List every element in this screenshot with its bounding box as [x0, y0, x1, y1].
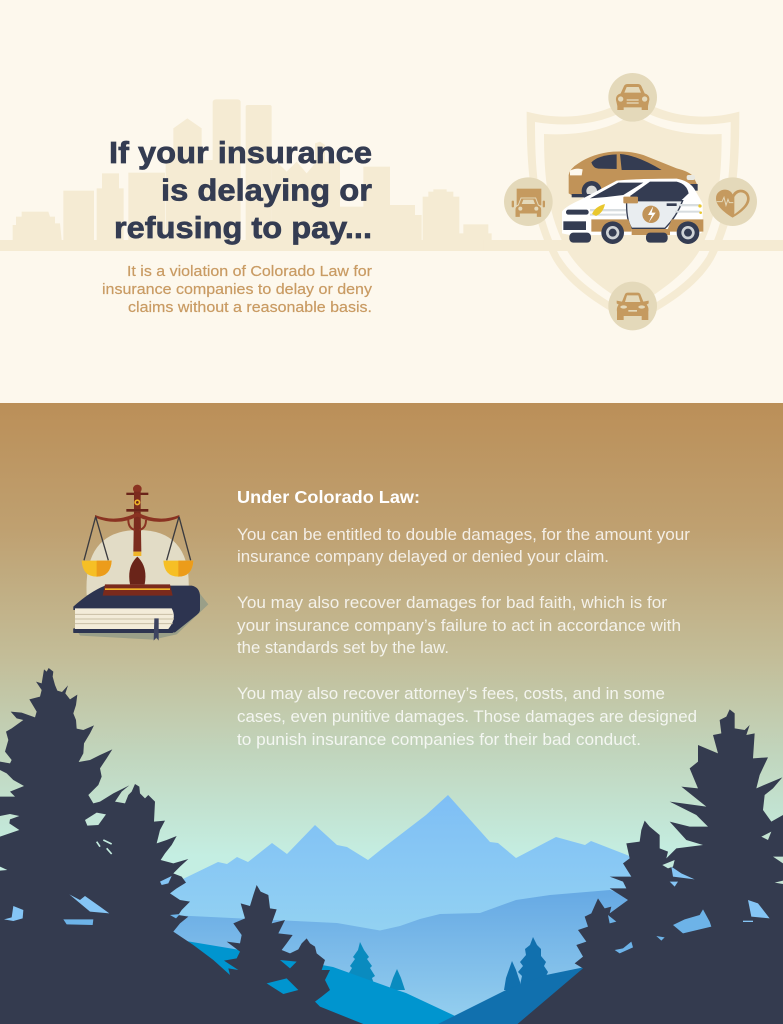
paragraph 3: You may also recover attorney’s fees, costs, and in some — [237, 685, 665, 703]
book cover — [73, 586, 200, 632]
sky holes — [85, 813, 106, 826]
lower section sky gradient — [0, 403, 783, 1024]
icon: car circle top — [608, 73, 657, 122]
paragraph 3: cases, even punitive damages. Those damages are designed — [237, 708, 697, 726]
top section background — [0, 0, 783, 403]
shield and cars illustration — [483, 73, 783, 330]
paragraph 2: your insurance company’s failure to act in accordance with — [237, 617, 681, 635]
heading: Under Colorado Law: Under Colorado Law: — [237, 487, 420, 507]
landscape — [0, 668, 783, 1024]
paragraph 2 — [237, 594, 681, 657]
small blue trees — [346, 942, 405, 990]
left pan — [82, 561, 112, 577]
paragraph 1 — [237, 526, 691, 566]
paragraph 2: the standards set by the law. — [237, 639, 449, 657]
icon: heart circle right — [708, 177, 757, 226]
shield outline — [527, 95, 739, 323]
city skyline — [13, 99, 492, 244]
halo — [86, 530, 189, 595]
title: refusing to pay... — [114, 210, 372, 245]
icon: car circle bottom — [608, 282, 657, 330]
paragraph 1: insurance company delayed or denied your claim. — [237, 548, 609, 566]
base — [103, 584, 173, 596]
paragraph 3 — [237, 685, 697, 749]
ground line — [0, 240, 783, 251]
subtitle — [102, 264, 373, 316]
shield gap — [535, 105, 731, 316]
brown car — [569, 151, 698, 201]
dark blue hill — [438, 967, 585, 1024]
subtitle: It is a violation of Colorado Law for — [127, 264, 372, 280]
beam — [95, 512, 179, 522]
left trees silhouette — [0, 668, 363, 1024]
subtitle: insurance companies to delay or deny — [102, 282, 373, 298]
near blue hill — [180, 940, 470, 1024]
far mountains — [140, 795, 700, 1024]
right trees silhouette — [516, 709, 783, 1024]
sky holes — [662, 860, 675, 868]
ground line across shield — [483, 240, 783, 251]
middle ridge — [170, 890, 700, 1024]
subtitle: claims without a reasonable basis. — [128, 300, 372, 316]
title — [109, 135, 372, 245]
column — [133, 512, 141, 552]
book pages — [75, 608, 174, 629]
white car — [562, 179, 703, 244]
icon: truck circle left — [504, 177, 553, 226]
pan strings — [84, 517, 191, 560]
paragraph 1: You can be entitled to double damages, for the amount your — [237, 526, 691, 544]
right pan — [163, 561, 193, 577]
top finial — [133, 485, 142, 493]
paragraph 2: You may also recover damages for bad faith, which is for — [237, 594, 668, 612]
ridge trees — [504, 937, 549, 990]
title: If your insurance — [109, 135, 372, 170]
shield inner — [544, 113, 722, 308]
scales of justice on book — [73, 485, 208, 641]
book shadow — [77, 592, 208, 640]
left forest shape — [0, 668, 363, 1024]
title: is delaying or — [161, 172, 372, 208]
paragraph 3: to punish insurance companies for their bad conduct. — [237, 731, 641, 749]
right forest shape — [516, 709, 783, 1024]
bookmark — [154, 618, 159, 641]
